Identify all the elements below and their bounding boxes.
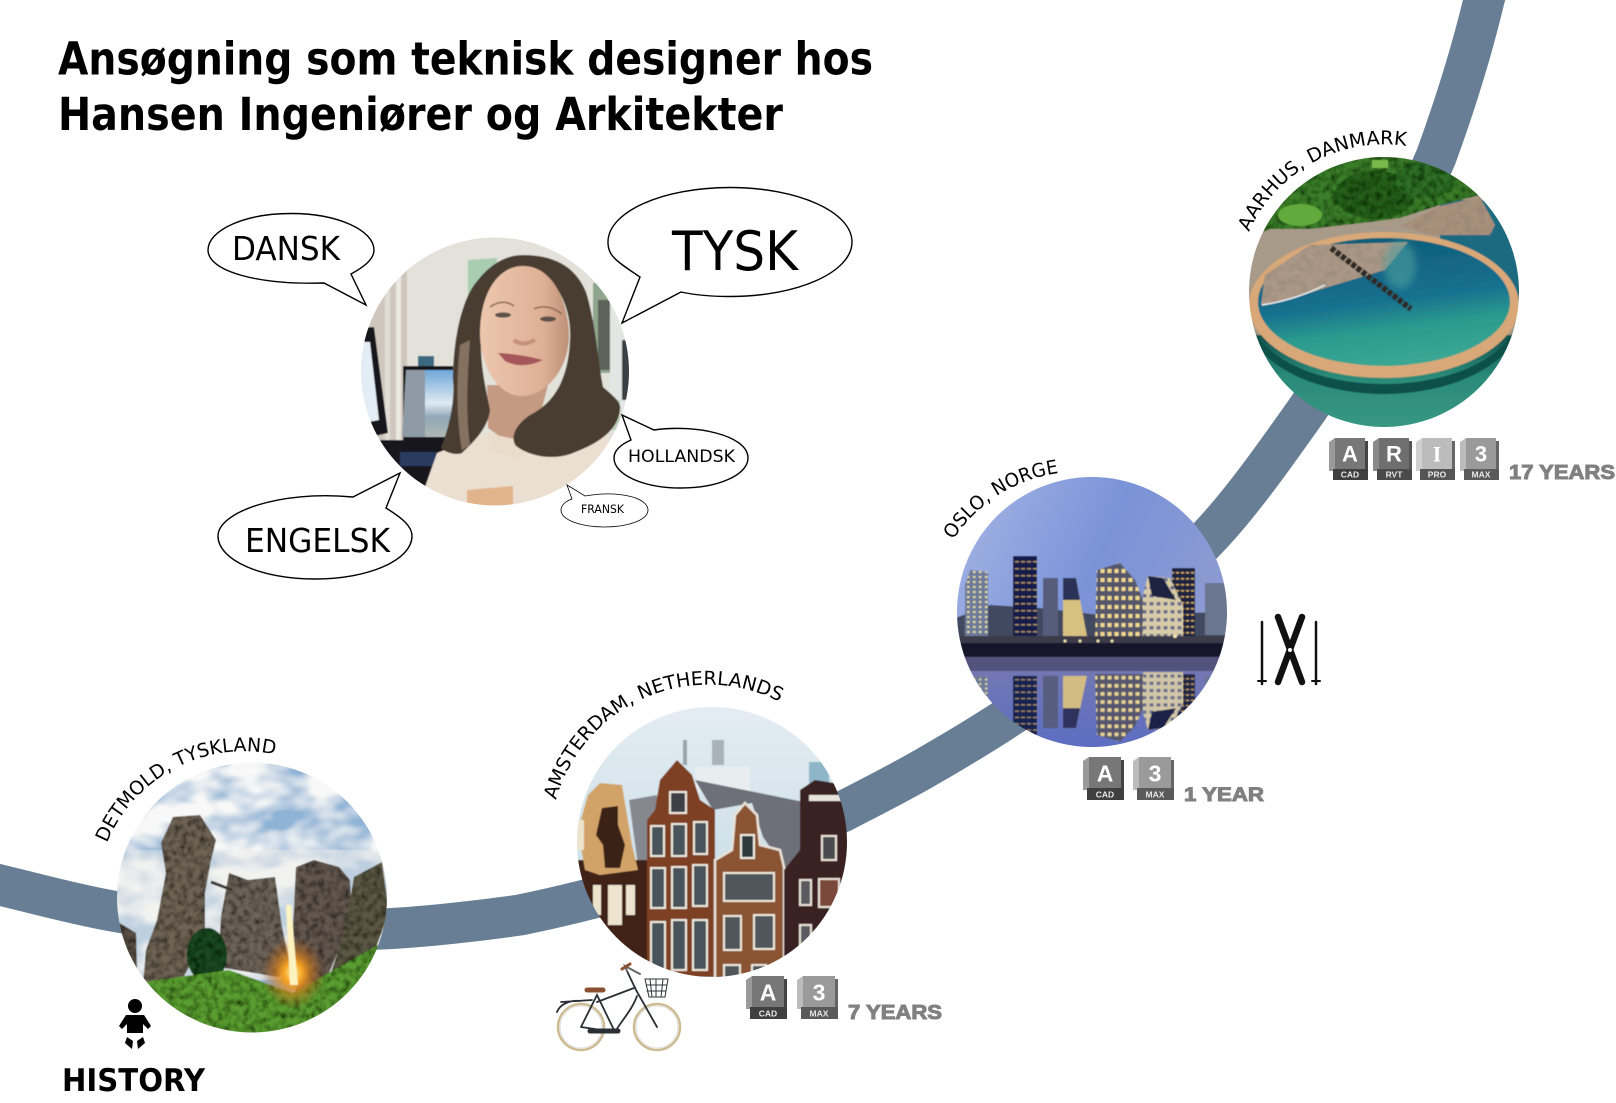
icon: AutoCAD badge (Aarhus): CAD xyxy=(1341,470,1359,480)
icon: AutoCAD badge (Amsterdam): CAD xyxy=(759,1008,777,1018)
portrait photo xyxy=(358,237,630,512)
left house xyxy=(578,859,648,961)
speech bubble: DANSK: DANSK xyxy=(232,229,341,268)
icon: AutoCAD badge (Oslo) xyxy=(1083,757,1124,800)
hair xyxy=(441,255,620,457)
title: Hansen Ingeniører og Arkitekter xyxy=(58,88,784,141)
icon: Revit badge (Aarhus): RVT xyxy=(1386,470,1403,480)
icon: 3ds Max badge (Amsterdam): 3 xyxy=(813,980,825,1006)
speech bubble: TYSK: TYSK xyxy=(671,220,799,283)
icon: 3ds Max badge (Oslo) xyxy=(1133,757,1174,800)
shirt xyxy=(424,434,609,504)
eyes, brows, nose, mouth xyxy=(495,312,511,318)
roof behind xyxy=(694,780,801,868)
title xyxy=(58,32,873,141)
text: 17 years: 17 YEARS xyxy=(1509,462,1615,484)
icon: 3ds Max badge (Aarhus) xyxy=(1460,438,1499,480)
neck xyxy=(487,385,548,440)
icon: Revit badge (Aarhus): R xyxy=(1386,442,1402,466)
speech bubble: DANSK xyxy=(208,214,374,305)
left monitor xyxy=(364,326,388,436)
speech bubble: HOLLANDSK: HOLLANDSK xyxy=(628,447,736,467)
icon: Inventor Pro badge (Aarhus): PRO xyxy=(1428,470,1447,480)
photo: Amsterdam houses xyxy=(577,707,847,977)
icon: skis and poles xyxy=(1258,617,1320,684)
text: 1 year: 1 YEAR xyxy=(1184,784,1264,806)
icon: 3ds Max badge (Aarhus): MAX xyxy=(1472,470,1491,480)
icon: AutoCAD badge (Amsterdam) xyxy=(746,976,787,1019)
icon: Inventor Pro badge (Aarhus) xyxy=(1416,438,1455,480)
icon: Revit badge (Aarhus) xyxy=(1373,438,1412,480)
icon: AutoCAD badge (Aarhus) xyxy=(1329,438,1368,480)
photo: Detmold rocks xyxy=(117,763,387,1032)
icon: AutoCAD badge (Oslo): A xyxy=(1097,760,1113,786)
label: Detmold: DETMOLD, TYSKLAND xyxy=(95,737,276,842)
icon: bicycle xyxy=(557,964,680,1050)
icon: 3ds Max badge (Amsterdam): MAX xyxy=(810,1008,829,1018)
icon: AutoCAD badge (Oslo): CAD xyxy=(1096,790,1114,800)
photo: Oslo skyline xyxy=(957,477,1227,747)
text: 7 years: 7 YEARS xyxy=(848,1002,942,1024)
icon: AutoCAD badge (Aarhus): A xyxy=(1342,442,1358,466)
speech bubble: FRANSK: FRANSK xyxy=(581,502,624,516)
icon: AutoCAD badge (Amsterdam): A xyxy=(760,980,776,1006)
sea below ring xyxy=(1256,334,1512,427)
stepped house xyxy=(715,803,784,980)
photo: Aarhus infinite bridge xyxy=(1245,155,1525,435)
icon: baby xyxy=(119,999,151,1049)
icon: Inventor Pro badge (Aarhus): I xyxy=(1433,442,1441,466)
icon: 3ds Max badge (Oslo): MAX xyxy=(1146,790,1165,800)
label: Aarhus: AARHUS, DANMARK xyxy=(1239,130,1408,232)
speech bubble: TYSK xyxy=(608,188,852,323)
collar xyxy=(499,435,513,440)
speech bubble: FRANSK xyxy=(561,485,648,527)
title: Ansøgning som teknisk designer hos xyxy=(58,32,873,86)
icon: 3ds Max badge (Oslo): 3 xyxy=(1149,760,1161,786)
speech bubble: HOLLANDSK xyxy=(614,415,748,488)
dark right house xyxy=(783,780,847,956)
speech bubble: ENGELSK: ENGELSK xyxy=(245,521,391,560)
face xyxy=(480,266,569,396)
timeline curve xyxy=(0,0,1500,930)
speech bubble: ENGELSK xyxy=(218,473,412,579)
icon: 3ds Max badge (Amsterdam) xyxy=(797,976,838,1019)
label: Oslo: OSLO, NORGE xyxy=(944,460,1058,537)
icon: 3ds Max badge (Aarhus): 3 xyxy=(1475,442,1487,466)
center brick house xyxy=(647,760,715,977)
heading: history: HISTORY xyxy=(62,1063,206,1099)
label: Amsterdam: AMSTERDAM, NETHERLANDS xyxy=(544,670,784,800)
laptop xyxy=(403,366,453,440)
